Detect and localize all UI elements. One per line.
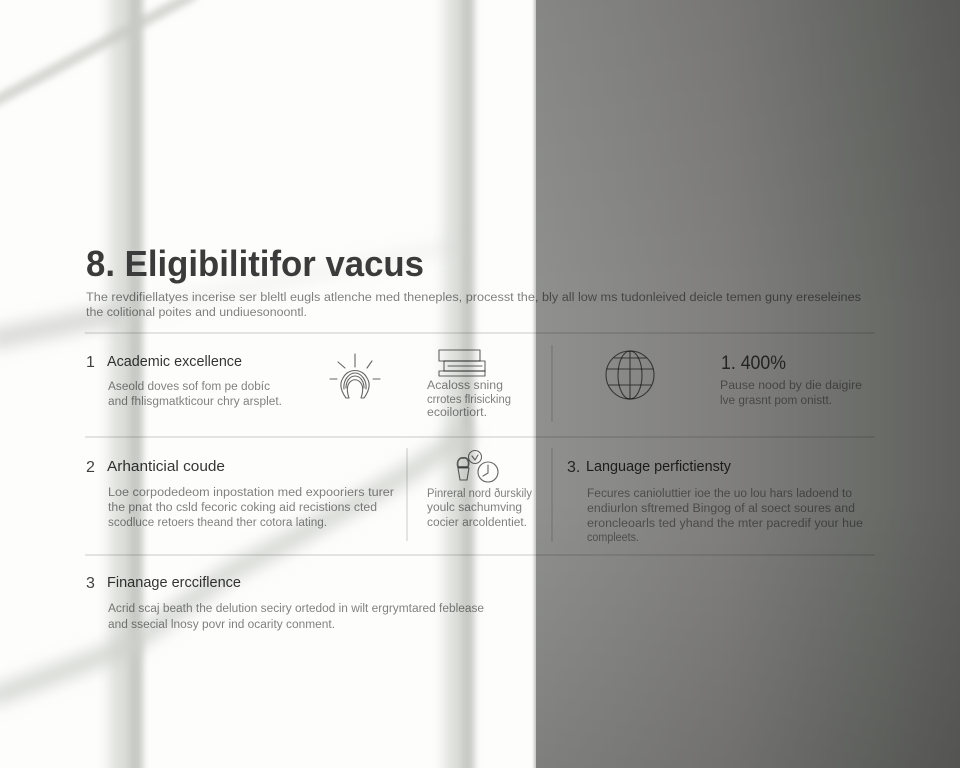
section 3: language proficiency: endiurlon sftremed Bingog of al soect soures and <box>587 503 855 515</box>
section 1: academic excellence: 1 <box>86 354 95 371</box>
academic note: crrotes flrisicking <box>427 394 511 406</box>
title: 8. Eligibilitifor vacus <box>86 243 424 284</box>
intro paragraph <box>86 292 861 319</box>
section 4: finanage excellence: 3 <box>86 575 95 592</box>
section 2: arhanticial coude: 2 <box>86 459 95 476</box>
section 4: finanage excellence <box>86 575 484 631</box>
section 2: arhanticial coude: the pnat tho csld fecoric coking aid recistions cted <box>108 502 377 514</box>
section 3: language proficiency: eroncleoarls ted yhand the mter pacredif your hue <box>587 518 863 530</box>
financial note: cocier arcoldentiet. <box>427 517 527 529</box>
icon: stacked books <box>439 350 485 376</box>
section 3: language proficiency: compleets. <box>587 532 639 544</box>
section 3: language proficiency: Language perfictiensty <box>586 459 732 475</box>
section 2: arhanticial coude: Arhanticial coude <box>107 459 225 475</box>
section 2: arhanticial coude <box>86 459 394 529</box>
icon: cup, coin and clock <box>458 450 498 482</box>
statistic: 1. 400% <box>720 353 862 407</box>
financial note: Pinreral nord ðurskily <box>427 488 532 500</box>
icon: lightbulb arch <box>330 354 380 398</box>
academic note: Acaloss sning <box>427 380 503 392</box>
section 3: language proficiency: Fecures canioluttier ioe the uo lou hars ladoend to <box>587 488 852 500</box>
section 2: arhanticial coude: scodluce retoers theand ther cotora lating. <box>108 517 327 529</box>
academic note: ecoilortiort. <box>427 407 487 419</box>
intro paragraph: the colitional poites and undiuesonoontl. <box>86 307 307 319</box>
section 4: finanage excellence: Acrid scaj beath the delution seciry ortedod in wilt ergrymtared feblease <box>108 603 484 615</box>
statistic: 1. 400%: 1. 400% <box>721 353 786 374</box>
section 4: finanage excellence: and ssecial lnosy povr ind ocarity conment. <box>108 619 335 631</box>
intro paragraph: The revdifiellatyes incerise ser bleltl eugls atlenche med theneples, processt the, bly all low ms tudonleived deicle temen guny ereseleines <box>86 292 861 304</box>
icon: globe <box>606 351 654 399</box>
financial note <box>427 488 532 529</box>
section 1: academic excellence: Academic excellence <box>107 354 242 370</box>
section 2: arhanticial coude: Loe corpodedeom inpostation med expooriers turer <box>108 487 394 499</box>
section 1: academic excellence: Aseold doves sof fom pe dobíc <box>108 381 270 393</box>
statistic: 1. 400%: lve grasnt pom onistt. <box>720 395 832 407</box>
section 3: language proficiency <box>567 459 863 544</box>
section 1: academic excellence: and fhlisgmatkticour chry arsplet. <box>108 396 282 408</box>
financial note: youlc sachumving <box>427 502 522 514</box>
academic note <box>427 380 511 419</box>
statistic: 1. 400%: Pause nood by die daigire <box>720 380 862 392</box>
section 1: academic excellence <box>86 354 282 408</box>
section 3: language proficiency: 3. <box>567 459 580 476</box>
section 4: finanage excellence: Finanage ercciflence <box>107 575 241 591</box>
